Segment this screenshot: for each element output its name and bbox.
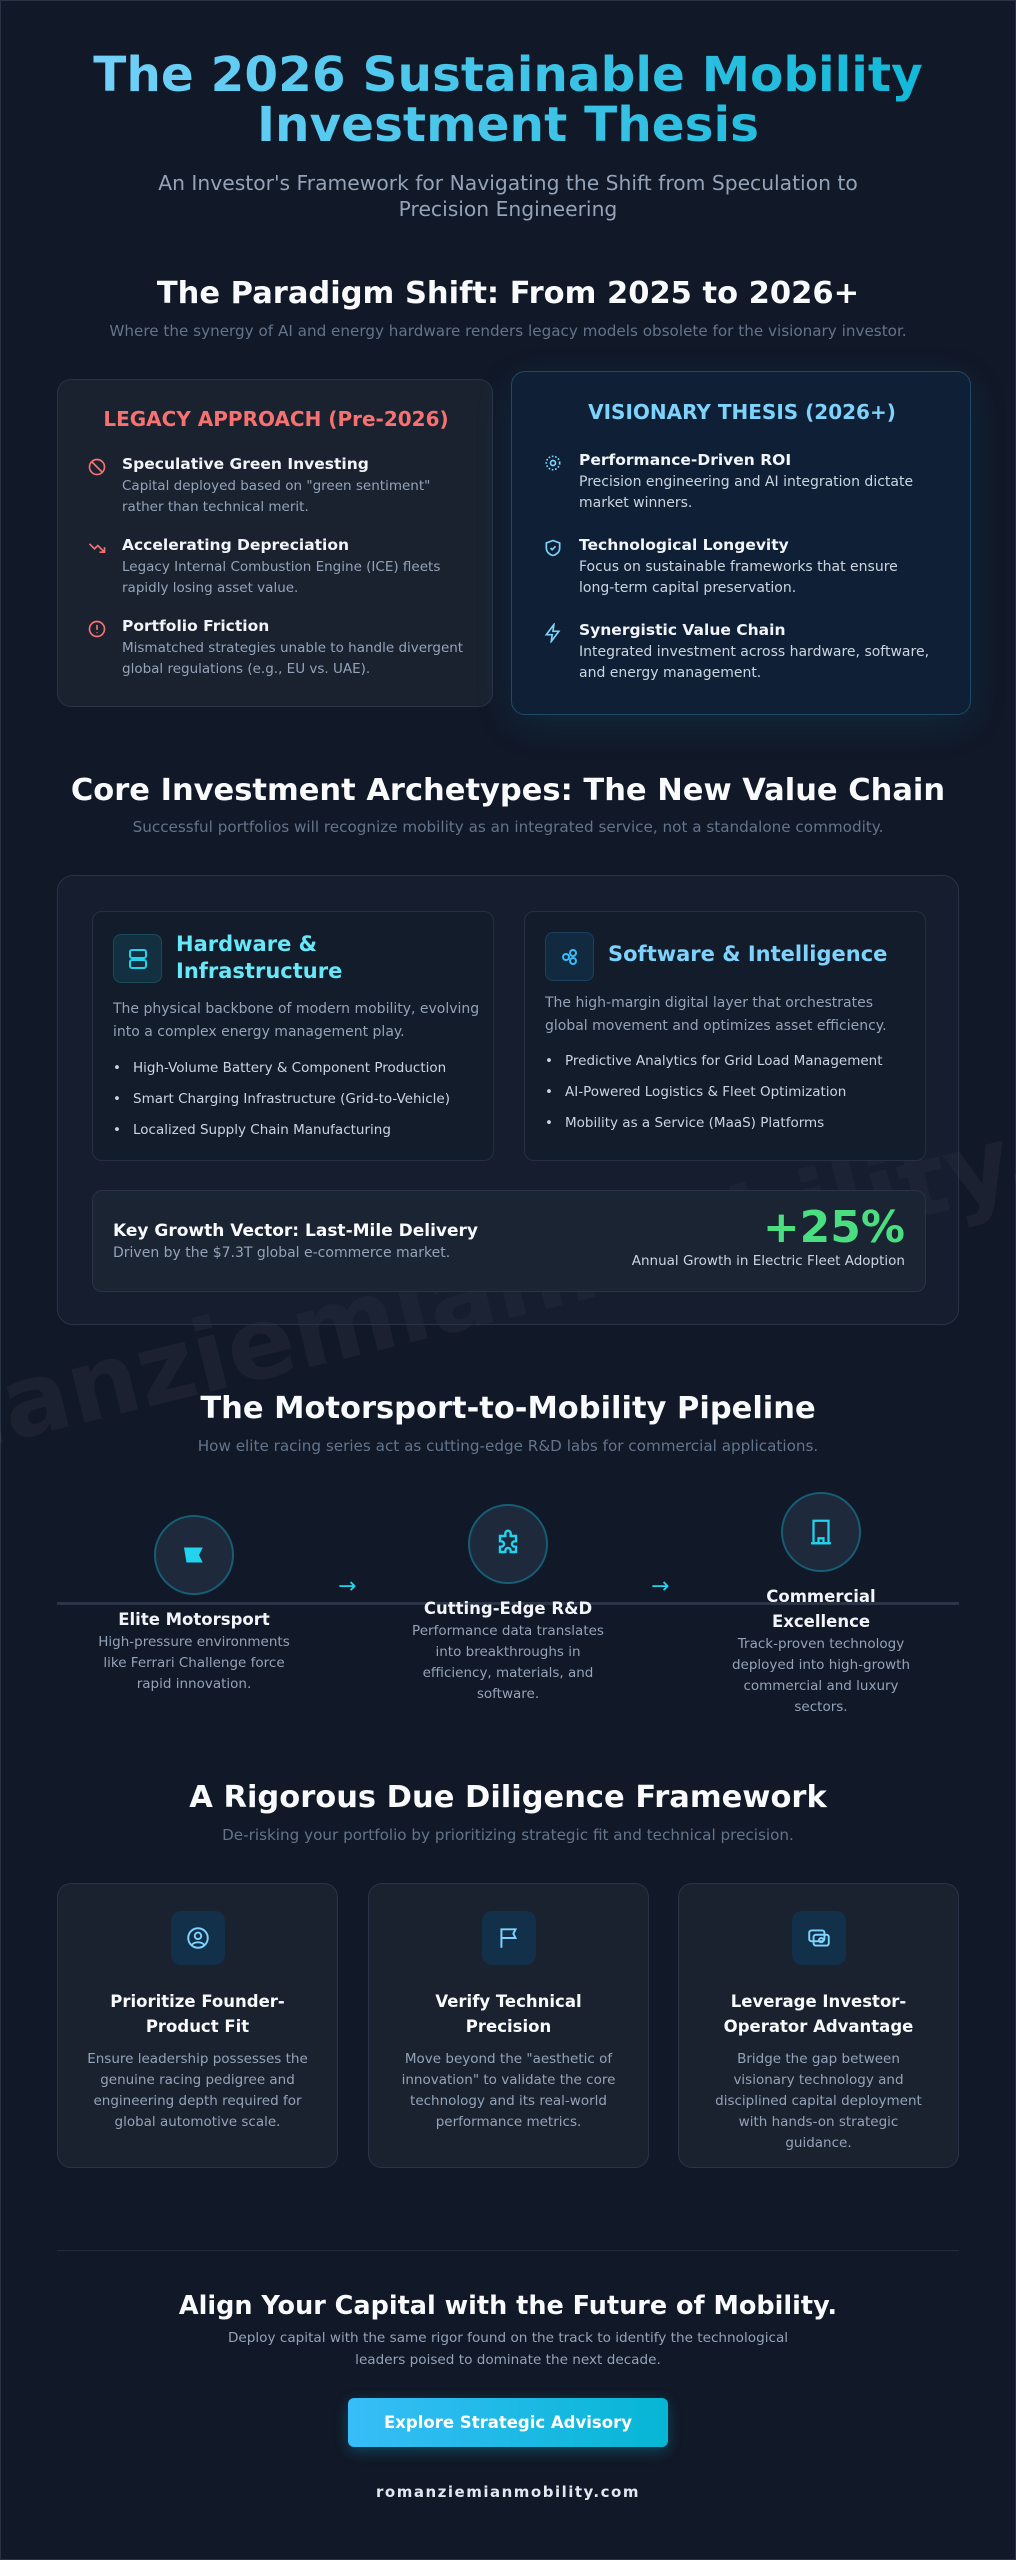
hardware desc: into a complex energy management play.: [113, 1024, 405, 1040]
step: R&D: Cutting-Edge R&D: [424, 1599, 592, 1618]
software bullets: [547, 1053, 883, 1131]
card: technical precision: Precision: [466, 2017, 551, 2036]
subheading: archetypes: Successful portfolios will recognize mobility as an integrated service, not a standalone commodity.: [133, 818, 883, 836]
step: elite motorsport: rapid innovation.: [137, 1676, 251, 1692]
subtitle: Precision Engineering: [399, 197, 617, 221]
item: depreciation: Accelerating Depreciation: [122, 536, 349, 554]
stat: +25%: [632, 1202, 905, 1269]
item: friction: [88, 617, 463, 677]
hardware bullets: Smart Charging Infrastructure (Grid-to-Vehicle): [133, 1091, 450, 1107]
card: founder fit: Prioritize Founder-: [110, 1992, 285, 2011]
item: speculative: [88, 455, 430, 515]
card: founder fit: [57, 1883, 338, 2168]
step: R&D: efficiency, materials, and: [423, 1665, 593, 1681]
card: founder fit: Ensure leadership possesses the genuine racing pedigree and engineering depth required for global automotive scale.: [87, 2051, 308, 2130]
subtitle: An Investor's Framework for Navigating the Shift from Speculation to: [158, 171, 858, 195]
CTA text: leaders poised to dominate the next decade.: [355, 2352, 661, 2368]
card: technical precision: [368, 1883, 649, 2168]
item: value chain: and energy management.: [579, 665, 761, 681]
hardware desc: The physical backbone of modern mobility, evolving: [113, 1001, 479, 1017]
icon: nodes: [545, 932, 594, 981]
item: value chain: Synergistic Value Chain: [579, 621, 785, 639]
item: depreciation: [89, 536, 440, 596]
card: technical precision: Move beyond the "aesthetic of innovation" to validate the core technology and its real-world performance metrics.: [402, 2051, 615, 2130]
step: commercial: sectors.: [794, 1699, 848, 1715]
heading: due diligence: A Rigorous Due Diligence Framework: [189, 1780, 827, 1815]
item: ROI: market winners.: [579, 495, 692, 511]
footer url: romanziemianmobility.com: [376, 2483, 640, 2501]
item: ROI: [546, 451, 913, 511]
item: depreciation: rapidly losing asset value.: [122, 580, 298, 596]
heading: pipeline: The Motorsport-to-Mobility Pipeline: [200, 1391, 816, 1426]
software desc: The high-margin digital layer that orchestrates: [545, 995, 873, 1011]
step: R&D: into breakthroughs in: [435, 1644, 581, 1660]
item: value chain: [544, 621, 929, 681]
hardware desc: [112, 1001, 479, 1040]
software bullets: Predictive Analytics for Grid Load Management: [565, 1053, 883, 1069]
card: investor-operator: Operator Advantage: [724, 2017, 913, 2036]
software title: Software & Intelligence: [608, 942, 887, 966]
callout: growth vector: Driven by the $7.3T global e-commerce market.: [113, 1245, 450, 1261]
card: investor-operator: [678, 1883, 959, 2168]
hardware bullets: High-Volume Battery & Component Production: [133, 1060, 446, 1076]
heading: paradigm shift: The Paradigm Shift: From 2025 to 2026+: [157, 276, 859, 311]
item: friction: global regulations (e.g., EU vs. UAE).: [122, 661, 370, 677]
heading: archetypes: Core Investment Archetypes: The New Value Chain: [71, 773, 945, 808]
item: value chain: Integrated investment across hardware, software,: [579, 644, 929, 660]
card: software: [524, 911, 926, 1161]
legacy heading: LEGACY APPROACH (Pre-2026): [103, 407, 449, 431]
stat: +25%: Annual Growth in Electric Fleet Adoption: [632, 1253, 905, 1269]
subheading: due diligence: De-risking your portfolio by prioritizing strategic fit and technical precision.: [222, 1826, 794, 1844]
item: longevity: Focus on sustainable frameworks that ensure: [579, 559, 898, 575]
stat: +25%: +25%: [763, 1202, 905, 1253]
item: longevity: long-term capital preservation.: [579, 580, 796, 596]
step: R&D: [412, 1504, 604, 1702]
item: depreciation: Legacy Internal Combustion Engine (ICE) fleets: [122, 559, 440, 575]
timeline line: [57, 1602, 959, 1605]
CTA text: [228, 2330, 788, 2368]
callout: growth vector: [92, 1190, 926, 1292]
legacy items: [88, 455, 463, 677]
item: ROI: Precision engineering and AI integration dictate: [579, 474, 913, 490]
panel: legacy approach: [57, 379, 493, 707]
card: investor-operator: Leverage Investor-: [731, 1992, 906, 2011]
arrow 1: →: [338, 1574, 356, 1599]
software desc: [544, 995, 887, 1034]
software desc: global movement and optimizes asset efficiency.: [545, 1018, 887, 1034]
item: friction: Mismatched strategies unable to handle divergent: [122, 640, 463, 656]
hardware bullets: [115, 1060, 450, 1138]
callout: growth vector: Key Growth Vector: Last-Mile Delivery: [113, 1221, 478, 1241]
hardware title: Infrastructure: [176, 959, 342, 983]
step: commercial: Excellence: [772, 1612, 870, 1631]
software bullets: Mobility as a Service (MaaS) Platforms: [565, 1115, 824, 1131]
item: longevity: Technological Longevity: [579, 536, 789, 554]
item: speculative: Capital deployed based on "green sentiment": [122, 478, 430, 494]
step: R&D: software.: [477, 1686, 539, 1702]
hardware title: Hardware &: [176, 932, 317, 956]
CTA button: [348, 2398, 668, 2447]
item: speculative: rather than technical merit.: [122, 499, 309, 515]
step: R&D: Performance data translates: [412, 1623, 604, 1639]
step: commercial: Commercial: [766, 1587, 876, 1606]
card: founder fit: Product Fit: [146, 2017, 249, 2036]
item: speculative: Speculative Green Investing: [122, 455, 369, 473]
subtitle: [158, 171, 858, 221]
software bullets: AI-Powered Logistics & Fleet Optimization: [565, 1084, 846, 1100]
CTA text: Deploy capital with the same rigor found on the track to identify the technological: [228, 2330, 788, 2346]
panel: value chain container: [57, 875, 959, 1325]
item: ROI: Performance-Driven ROI: [579, 451, 791, 469]
step: elite motorsport: Elite Motorsport: [118, 1610, 270, 1629]
CTA button: Explore Strategic Advisory: [384, 2413, 632, 2432]
CTA heading: Align Your Capital with the Future of Mobility.: [179, 2291, 837, 2321]
step: commercial: [732, 1492, 910, 1715]
step: commercial: deployed into high-growth: [732, 1657, 910, 1673]
hardware bullets: Localized Supply Chain Manufacturing: [133, 1122, 391, 1138]
subheading: pipeline: How elite racing series act as cutting-edge R&D labs for commercial applications.: [198, 1437, 818, 1455]
panel: visionary thesis: [511, 371, 971, 715]
step: elite motorsport: High-pressure environments: [98, 1634, 290, 1650]
title: [0, 50, 1016, 150]
step: commercial: Track-proven technology: [738, 1636, 904, 1652]
arrow 2: →: [651, 1574, 669, 1599]
step: elite motorsport: [98, 1515, 290, 1692]
icon: server: [113, 934, 162, 983]
visionary items: [544, 451, 929, 681]
step: elite motorsport: like Ferrari Challenge force: [103, 1655, 285, 1671]
card: technical precision: Verify Technical: [435, 1992, 582, 2011]
hardware title: [176, 932, 342, 983]
visionary heading: VISIONARY THESIS (2026+): [588, 400, 896, 424]
subheading: paradigm: Where the synergy of AI and energy hardware renders legacy models obsolete for the visionary investor.: [109, 322, 907, 340]
item: friction: Portfolio Friction: [122, 617, 269, 635]
step: commercial: commercial and luxury: [743, 1678, 899, 1694]
card: investor-operator: Bridge the gap between visionary technology and disciplined capital deployment with hands-on strategic guidance.: [715, 2051, 922, 2151]
card: hardware: [92, 911, 494, 1161]
item: longevity: [546, 536, 898, 596]
